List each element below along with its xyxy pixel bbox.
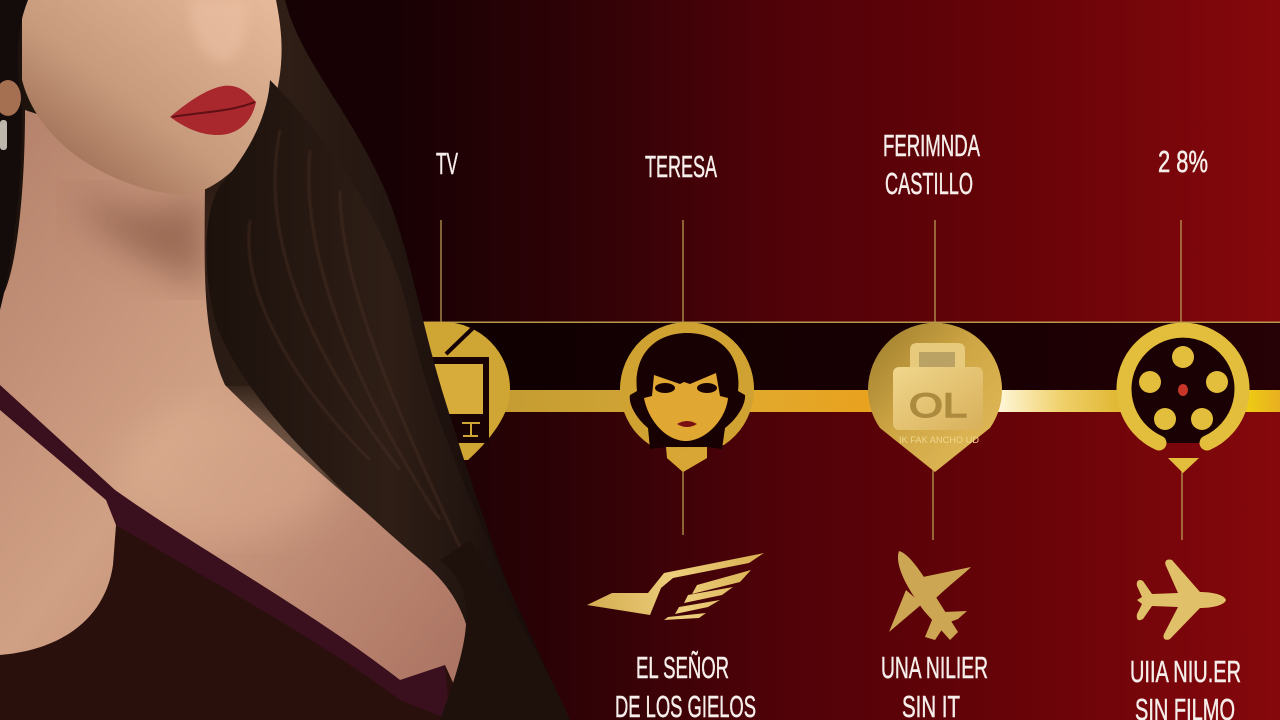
label: Fernanda: FERIMNDA xyxy=(883,128,980,163)
hair lower strand xyxy=(440,540,570,720)
icon: film reel xyxy=(1124,330,1242,473)
gold bar xyxy=(500,390,1280,412)
label: Castillo: CASTILLO xyxy=(885,166,973,201)
hair back xyxy=(0,0,570,720)
portrait photo xyxy=(0,0,570,720)
dress front panel xyxy=(0,525,470,720)
bag letters: OL xyxy=(909,387,967,425)
icon: Teresa portrait xyxy=(620,322,754,472)
nose shading xyxy=(190,0,246,62)
chest highlight xyxy=(120,400,340,540)
icon: wing xyxy=(587,553,764,620)
lips xyxy=(170,86,256,135)
hair strands xyxy=(249,130,480,590)
bottom labels xyxy=(615,650,1241,720)
icon: airplane 2 xyxy=(1137,559,1226,640)
bag caption: IK FAK ANCHO UD xyxy=(899,435,979,445)
hair right mass xyxy=(206,80,570,720)
timeline xyxy=(405,220,1280,540)
icon: television xyxy=(405,322,510,460)
label: percent: 2 8% xyxy=(1158,144,1208,179)
dress strap and neckline xyxy=(0,385,450,720)
ear xyxy=(0,80,21,116)
label: Una mujer 1: UNA NILIER xyxy=(881,650,988,685)
hair left xyxy=(0,0,28,310)
earring xyxy=(0,120,7,150)
top labels xyxy=(436,128,1208,201)
neck shadow xyxy=(70,190,205,290)
icon: airplane 1 xyxy=(889,551,971,640)
label: TV: TV xyxy=(436,146,458,181)
face xyxy=(22,0,282,195)
label: Teresa: TERESA xyxy=(645,149,717,184)
connector lines xyxy=(441,220,1182,540)
skin: neck and chest xyxy=(0,110,470,720)
top gold line xyxy=(405,322,1280,323)
label: El Señor: EL SEÑOR xyxy=(636,650,729,685)
lip line xyxy=(172,102,255,117)
icon: bag pin xyxy=(868,323,1002,472)
black band xyxy=(405,323,1280,390)
